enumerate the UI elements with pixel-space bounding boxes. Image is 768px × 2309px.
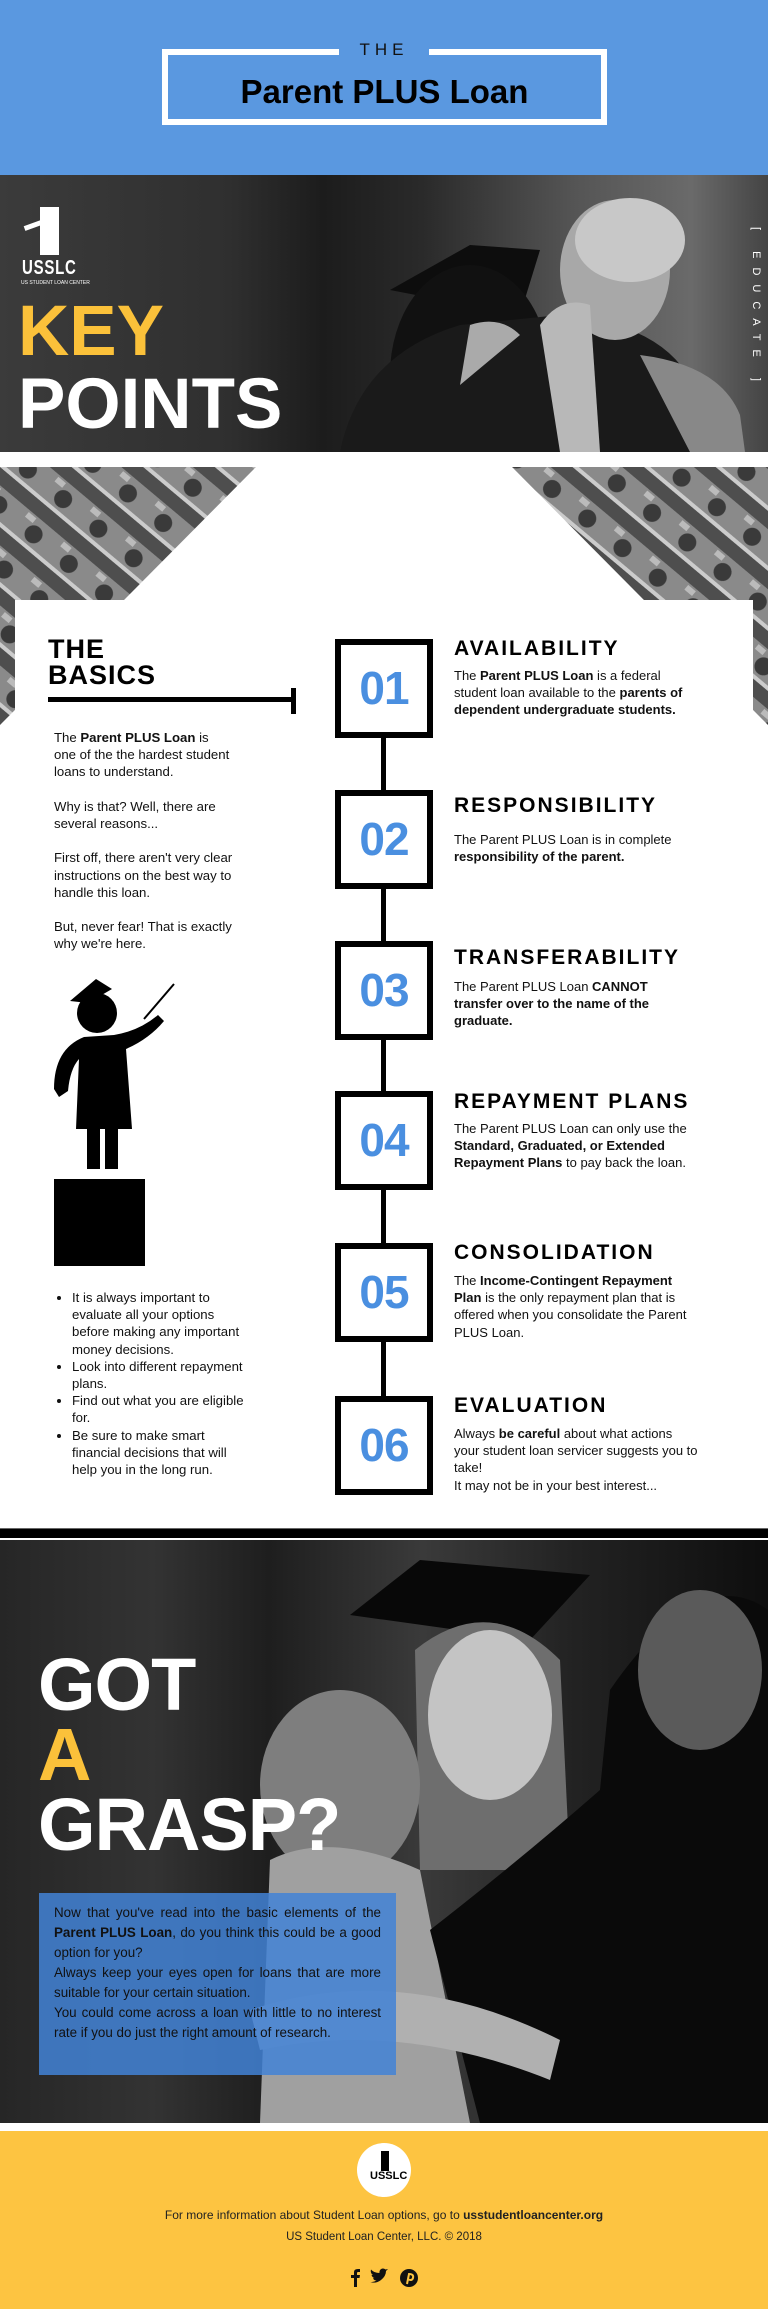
GOT A GRASP heading: A: [38, 1713, 90, 1796]
basics intro text: [54, 730, 232, 951]
icon: teacher figure on pedestal: [54, 979, 175, 1266]
bullet list: Find out what you are eligible for.: [72, 1393, 244, 1425]
footer logo: USSLC: [370, 2170, 407, 2182]
divider bar: [0, 1528, 768, 1538]
basics intro text: Why is that? Well, there are several reasons...: [54, 799, 216, 831]
logo: [21, 207, 90, 286]
step 05: [335, 1243, 433, 1342]
text: The Parent PLUS Loan is a federal student loan available to the parents of dependent undergraduate students.: [454, 668, 682, 717]
basics heading: [48, 634, 296, 714]
step 02: 02: [359, 813, 409, 865]
text: The Parent PLUS Loan CANNOT transfer over to the name of the graduate.: [454, 979, 649, 1028]
footer logo: [357, 2143, 411, 2197]
logo: US STUDENT LOAN CENTER: [21, 280, 90, 286]
main white panel: [15, 600, 753, 1520]
basics intro text: But, never fear! That is exactly why we're here.: [54, 919, 232, 951]
timeline connector: [381, 700, 386, 1440]
text: CONSOLIDATION: [454, 1241, 655, 1264]
blue text callout: [39, 1893, 396, 2075]
footer info text: For more information about Student Loan options, go to usstudentloancenter.org: [165, 2208, 603, 2222]
subtitle THE: [339, 38, 429, 62]
money corners: [0, 467, 768, 725]
GOT A GRASP heading: GRASP?: [38, 1783, 340, 1866]
educate vertical label: [ EDUCATE ]: [750, 227, 762, 390]
step 05: 05: [359, 1266, 409, 1318]
step 06: 06: [359, 1419, 409, 1471]
basics intro text: First off, there aren't very clear instructions on the best way to handle this loan.: [54, 850, 232, 900]
text: The Income-Contingent Repayment Plan is the only repayment plan that is offered when you consolidate the Parent PLUS Loan.: [454, 1273, 686, 1340]
basics heading: BASICS: [48, 660, 156, 690]
social icons: [351, 2268, 418, 2287]
KEY heading: KEY: [18, 292, 164, 371]
text: The Parent PLUS Loan is in complete responsibility of the parent.: [454, 832, 672, 864]
GOT A GRASP heading: GOT: [38, 1643, 195, 1726]
blue text callout: Now that you've read into the basic elements of the Parent PLUS Loan, do you think this could be a good option for you?: [54, 1905, 381, 1960]
basics heading: THE: [48, 634, 105, 664]
bullet list: It is always important to evaluate all your options before making any important money decisions.: [72, 1290, 239, 1357]
footer: [0, 2131, 768, 2309]
text: The Parent PLUS Loan can only use the Standard, Graduated, or Extended Repayment Plans to pay back the loan.: [454, 1121, 687, 1170]
main title: Parent PLUS Loan: [241, 73, 528, 110]
text: Always be careful about what actions your student loan servicer suggests you to take!: [454, 1426, 698, 1475]
bullet list: Look into different repayment plans.: [72, 1359, 243, 1391]
step 02: [335, 790, 433, 889]
header band: [0, 0, 768, 175]
text: REPAYMENT PLANS: [454, 1090, 689, 1113]
step 01: [335, 639, 433, 738]
logo: USSLC: [22, 257, 77, 279]
GOT A GRASP heading: [38, 1643, 340, 1866]
text: AVAILABILITY: [454, 637, 620, 660]
blue text callout: Always keep your eyes open for loans that are more suitable for your certain situation.: [54, 1965, 381, 2000]
step 06: [335, 1396, 433, 1495]
step 04: 04: [359, 1114, 409, 1166]
step 04: [335, 1091, 433, 1190]
blue text callout: You could come across a loan with little to no interest rate if you do just the right amount of research.: [54, 2005, 381, 2040]
step 01: 01: [359, 662, 409, 714]
bottom photo: [0, 1540, 768, 2123]
POINTS heading: POINTS: [18, 365, 282, 444]
basics intro text: The Parent PLUS Loan is one of the the hardest student loans to understand.: [54, 730, 229, 779]
text: TRANSFERABILITY: [454, 946, 680, 969]
title frame: [162, 49, 607, 125]
subtitle THE: THE: [360, 40, 408, 59]
step 03: [335, 941, 433, 1040]
copyright: US Student Loan Center, LLC. © 2018: [286, 2231, 482, 2243]
text: RESPONSIBILITY: [454, 794, 657, 817]
hero photo: [0, 175, 768, 452]
text: It may not be in your best interest...: [454, 1478, 657, 1493]
text: EVALUATION: [454, 1394, 607, 1417]
photo figures: [363, 198, 745, 452]
step 03: 03: [359, 964, 409, 1016]
bullet list: Be sure to make smart financial decisions that will help you in the long run.: [72, 1428, 227, 1477]
bullet list: [57, 1290, 244, 1477]
